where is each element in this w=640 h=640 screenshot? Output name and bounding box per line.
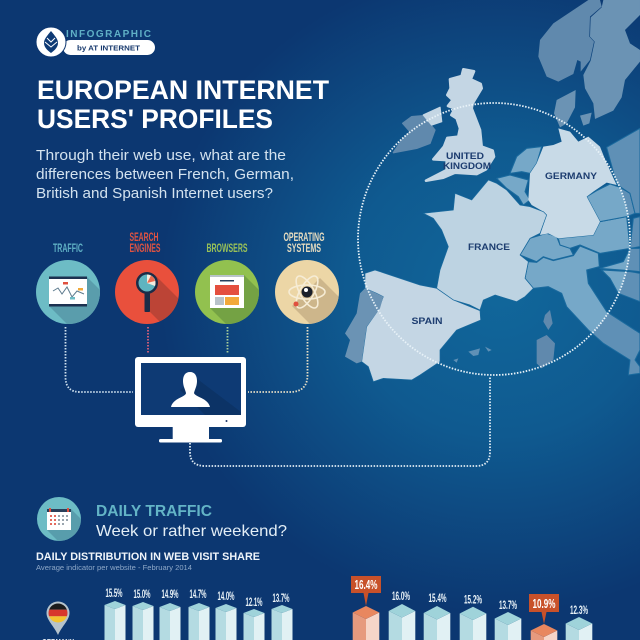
- label: operating systems: SYSTEMS: [287, 243, 321, 255]
- connector: monitor to map: [190, 377, 490, 466]
- logo: [36, 27, 155, 57]
- chart title: DAILY DISTRIBUTION IN WEB VISIT SHARE: [36, 551, 260, 563]
- bar: 14.9: [160, 603, 180, 640]
- bar: 10.9 highlighted: [531, 624, 557, 640]
- bar values: 12.1%: [246, 597, 262, 609]
- Northern Ireland: [423, 107, 442, 125]
- intro text: Through their web use, what are the: [36, 148, 286, 164]
- connector: browsers to monitor: [226, 327, 228, 353]
- bar: 14.7: [188, 603, 210, 640]
- label: search engines: SEARCH: [130, 232, 158, 244]
- bar: 15.2: [460, 607, 486, 640]
- intro text: British and Spanish Internet users?: [36, 186, 273, 202]
- callout: 16.4: 16.4%: [354, 578, 378, 592]
- logo leaf vein: [45, 38, 57, 47]
- France: [423, 180, 547, 310]
- icon: browsers: [195, 260, 259, 324]
- bar values: 14.9%: [162, 589, 178, 601]
- connector: traffic to monitor: [66, 327, 133, 392]
- bar values: 15.2%: [464, 592, 482, 606]
- neighbouring countries: [497, 128, 640, 375]
- label: browsers: BROWSERS: [206, 243, 248, 255]
- label: search engines: ENGINES: [130, 243, 161, 255]
- Germany: [528, 128, 617, 238]
- bar: 16.4 highlighted: [353, 606, 379, 640]
- intro text: [36, 148, 294, 202]
- bar values: 15.4%: [428, 591, 447, 605]
- bar: 13.7: [495, 612, 521, 640]
- label: traffic: TRAFFIC: [53, 243, 83, 255]
- label: Germany: GERMANY: [545, 171, 598, 182]
- callout: 16.4: [351, 576, 381, 606]
- connector: search to monitor: [147, 327, 149, 353]
- heading: daily traffic: DAILY TRAFFIC: [96, 503, 212, 520]
- Sweden: [583, 0, 640, 119]
- bar values: 14.7%: [190, 589, 206, 601]
- logo pill: [63, 40, 155, 55]
- Norway: [538, 0, 602, 82]
- bar values: [392, 589, 588, 617]
- icon: monitor with user: [135, 357, 246, 442]
- bar: 15.5: [104, 601, 126, 640]
- Balearic islands: [453, 347, 492, 363]
- Portugal: [345, 288, 383, 363]
- bar chart: Germany: [104, 588, 292, 640]
- label: operating systems: [284, 232, 325, 255]
- logo circle: [36, 27, 66, 57]
- bar: 12.3: [566, 617, 592, 640]
- title: [37, 75, 329, 134]
- bar: 15.4: [424, 606, 450, 640]
- bar: 14.0: [216, 604, 236, 640]
- Denmark: [554, 90, 592, 127]
- bar values: 14.0%: [218, 591, 234, 603]
- bar values: 12.3%: [570, 603, 588, 617]
- bar values: 16.0%: [392, 589, 410, 603]
- intro text: differences between French, German,: [36, 167, 294, 183]
- Spain: [362, 270, 481, 382]
- category labels: [53, 232, 325, 255]
- bar chart: second country: [351, 576, 592, 640]
- icon: calendar: [37, 497, 81, 541]
- chart subtitle: Average indicator per website - February 2014: [36, 563, 192, 572]
- bar values: 15.5%: [106, 588, 122, 600]
- United Kingdom: [426, 69, 494, 181]
- label: Kingdom: KINGDOM: [443, 161, 491, 172]
- label: Spain: SPAIN: [412, 316, 443, 327]
- bar: 13.7: [272, 605, 292, 640]
- title: EUROPEAN INTERNET: [37, 75, 329, 105]
- title: USERS' PROFILES: [37, 104, 273, 134]
- Corsica and Sardinia: [537, 310, 555, 368]
- bar: 15.0: [132, 602, 154, 640]
- map of Europe: [345, 0, 640, 382]
- neighbouring countries inside circle: [498, 147, 630, 333]
- bar values: 13.7%: [499, 598, 517, 612]
- icon: operating systems: [275, 260, 339, 324]
- bar values: [106, 588, 290, 609]
- logo word: INFOGRAPHIC: [66, 29, 151, 40]
- subheading: week or weekend: Week or rather weekend?: [96, 523, 287, 540]
- label: United Kingdom: UNITED: [446, 151, 484, 162]
- logo leaf: [44, 31, 58, 53]
- label: operating systems: OPERATING: [284, 232, 325, 244]
- callout: 10.9: [529, 594, 559, 624]
- icon: search engines: [115, 260, 179, 324]
- connector: systems to monitor: [248, 327, 308, 392]
- bar: 12.1: [244, 609, 264, 640]
- bar values: 13.7%: [272, 593, 290, 605]
- callout: 10.9: 10.9%: [532, 597, 556, 611]
- label: France: FRANCE: [468, 242, 510, 253]
- dotted circle: [358, 103, 630, 375]
- Ireland: [393, 116, 435, 153]
- icon: Germany pin: [46, 602, 70, 635]
- icon: traffic: [36, 260, 100, 324]
- bar: 16.0: [389, 604, 415, 640]
- logo subtitle: by AT INTERNET: [77, 46, 141, 52]
- label: search engines: [130, 232, 161, 255]
- bar values: 15.0%: [134, 589, 150, 601]
